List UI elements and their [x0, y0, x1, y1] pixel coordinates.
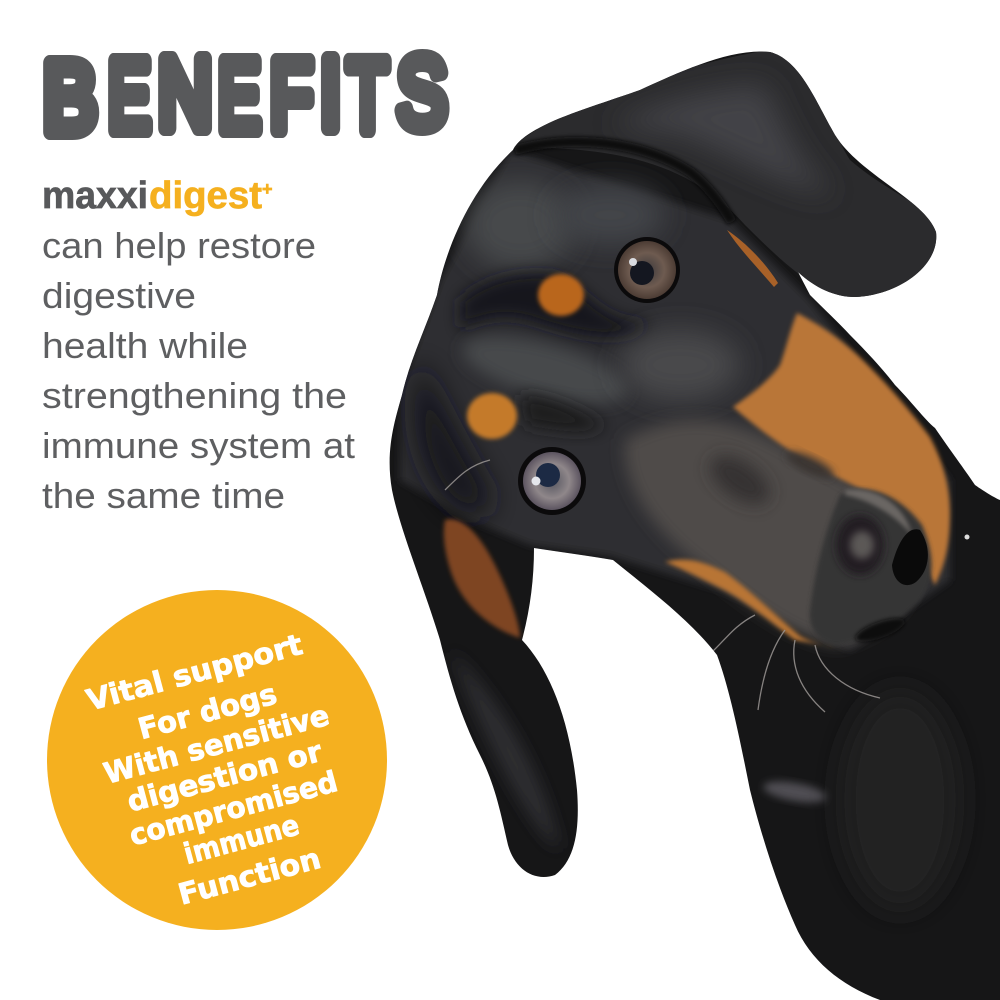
callout text: For dogs	[134, 677, 280, 746]
dark eye socket band	[460, 273, 650, 337]
title: E	[108, 39, 151, 151]
callout text: digestion or	[123, 734, 326, 819]
title: T	[347, 41, 388, 152]
title: N	[158, 37, 212, 149]
callout text: compromised	[126, 764, 341, 852]
lower eye	[518, 447, 586, 515]
callout text: Function	[174, 841, 324, 912]
ear sheen	[630, 80, 820, 192]
title: I	[320, 38, 341, 149]
mid forehead sheen	[462, 332, 626, 407]
tan near ear	[727, 230, 778, 287]
ear crease shadow	[515, 142, 732, 222]
title: E	[218, 39, 261, 151]
eyebrow spot: lower	[467, 393, 517, 439]
brand name: +	[262, 179, 273, 199]
body text: health while	[42, 325, 248, 366]
lower jaw shadow	[854, 616, 905, 643]
callout text: Vital support	[83, 627, 306, 717]
lower ear sheen	[456, 663, 558, 842]
nose sparkle	[964, 534, 970, 540]
callout circle	[47, 590, 387, 930]
top ear	[510, 50, 940, 299]
dog photo illustration	[380, 40, 1000, 1000]
title: S	[397, 36, 447, 148]
grey muzzle	[620, 416, 862, 652]
body text: strengthening the	[42, 375, 347, 416]
body text: digestive	[42, 275, 196, 316]
whiskers	[445, 460, 880, 712]
title: B	[43, 43, 97, 154]
body text: immune system at	[42, 425, 355, 466]
body text	[42, 225, 355, 516]
title	[43, 36, 447, 154]
brand name: maxxi	[42, 175, 148, 217]
nostril	[892, 529, 928, 585]
lower tan lip	[665, 560, 835, 647]
outer cheek dark band	[414, 360, 490, 518]
callout text	[83, 627, 341, 912]
chest sheen	[762, 778, 828, 806]
upper eye	[614, 237, 680, 303]
nose	[810, 489, 932, 645]
brand name	[42, 175, 273, 217]
title: F	[270, 41, 313, 152]
eyebrow spot: upper	[538, 274, 584, 316]
forehead sheen	[465, 180, 575, 270]
callout text: immune	[180, 808, 303, 871]
dark nape of tan	[788, 446, 838, 479]
body text: the same time	[42, 475, 285, 516]
inner lower ear	[444, 519, 520, 638]
dark band under brow	[520, 395, 605, 432]
brand name: digest	[149, 175, 262, 217]
callout text: With sensitive	[100, 698, 333, 791]
muzzle dark patches	[708, 452, 772, 508]
tan muzzle top	[733, 313, 950, 585]
head base	[400, 150, 950, 650]
body text: can help restore	[42, 225, 316, 266]
dog base silhouette	[380, 40, 1000, 1000]
